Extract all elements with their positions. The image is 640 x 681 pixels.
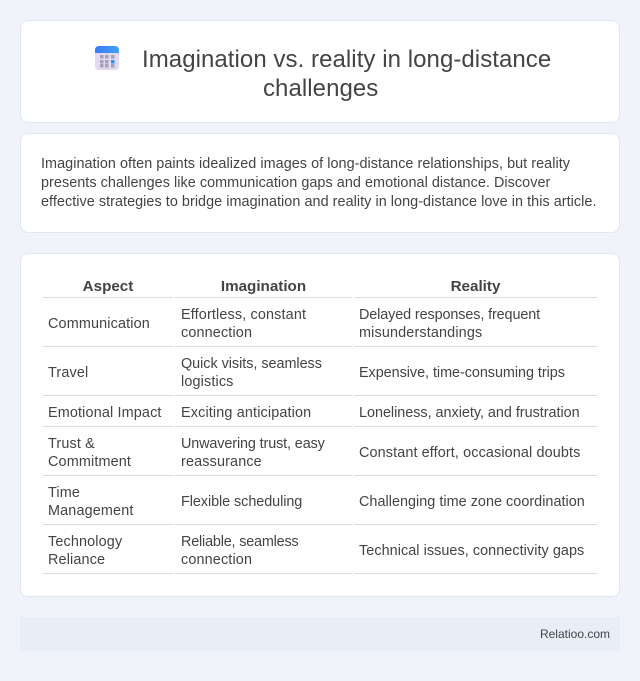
panel: title header xyxy=(20,20,620,123)
comparison table: Aspect xyxy=(83,278,133,295)
comparison table: Technology xyxy=(48,534,122,550)
comparison table: Emotional Impact xyxy=(48,404,162,420)
comparison table: Travel xyxy=(48,364,88,380)
footer: Relatioo.com xyxy=(540,627,610,641)
comparison table: Expensive, time-consuming trips xyxy=(359,364,565,380)
comparison table: Flexible scheduling xyxy=(181,494,302,510)
panel: comparison table xyxy=(20,253,620,597)
intro text: effective strategies to bridge imagination and reality in long-distance love in this article. xyxy=(41,194,597,210)
comparison table: Reliable, seamless xyxy=(181,534,299,550)
title: Imagination vs. reality in long-distance xyxy=(142,46,551,73)
comparison table: Quick visits, seamless xyxy=(181,356,322,372)
title xyxy=(142,46,551,102)
comparison table: reassurance xyxy=(181,454,262,470)
comparison table: Technical issues, connectivity gaps xyxy=(359,542,584,558)
panel: introduction xyxy=(20,133,620,233)
comparison table: Exciting anticipation xyxy=(181,404,311,420)
comparison table: Reality xyxy=(451,278,500,295)
comparison table: Imagination xyxy=(221,278,306,295)
comparison table: Communication xyxy=(48,316,150,332)
comparison table: Management xyxy=(48,502,134,518)
icon: calendar xyxy=(95,46,119,70)
comparison table: Effortless, constant xyxy=(181,306,306,322)
comparison table: connection xyxy=(181,324,252,340)
comparison table: Trust & xyxy=(48,436,95,452)
intro text: Imagination often paints idealized images of long-distance relationships, but reality xyxy=(41,156,570,172)
comparison table: Unwavering trust, easy xyxy=(181,436,325,452)
comparison table: Challenging time zone coordination xyxy=(359,494,585,510)
footer xyxy=(20,617,620,651)
comparison table xyxy=(43,278,597,574)
comparison table: misunderstandings xyxy=(359,324,482,340)
intro text xyxy=(41,156,597,210)
comparison table: Time xyxy=(48,484,80,500)
comparison table: logistics xyxy=(181,374,234,390)
comparison table: Commitment xyxy=(48,454,131,470)
intro text: presents challenges like communication gaps and emotional distance. Discover xyxy=(41,175,550,191)
comparison table: Loneliness, anxiety, and frustration xyxy=(359,404,580,420)
comparison table: connection xyxy=(181,552,252,568)
comparison table: Reliance xyxy=(48,552,105,568)
comparison table: Constant effort, occasional doubts xyxy=(359,444,580,460)
comparison table: Delayed responses, frequent xyxy=(359,306,540,322)
title: challenges xyxy=(263,75,378,102)
